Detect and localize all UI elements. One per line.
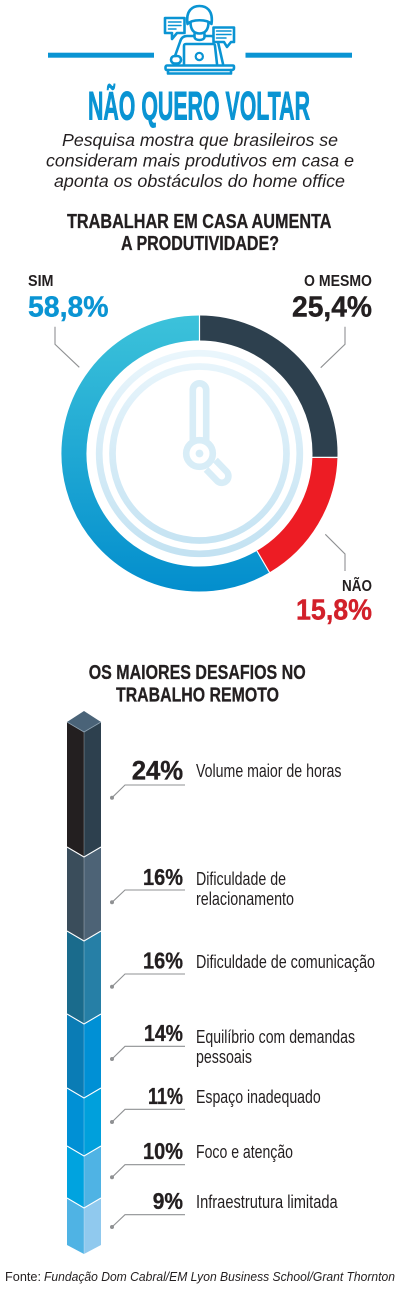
subtitle: Pesquisa mostra que brasileiros se — [62, 130, 338, 150]
subtitle — [46, 130, 354, 191]
heading: challenges: OS MAIORES DESAFIOS NO — [89, 662, 306, 684]
item: 11% espaco inadequado: 11% — [148, 1083, 183, 1109]
segment: sim 58,8% — [74, 328, 263, 579]
icon: person working at laptop with speech bubbles — [165, 6, 234, 74]
source note: Fonte: — [5, 1269, 41, 1284]
subtitle: aponta os obstáculos do home office — [54, 171, 345, 191]
segment 16% comunicacao — [67, 931, 101, 1024]
callout: sim: 58,8% — [28, 292, 108, 324]
segment 16% relacionamento — [67, 847, 101, 941]
segment: não 15,8% — [263, 458, 325, 562]
heading: productivity question — [67, 210, 332, 255]
item: 14% equilibrio com demandas pessoais: pessoais — [196, 1047, 252, 1067]
item: 16% dificuldade de relacionamento: Dificuldade de — [196, 869, 286, 889]
item: 14% equilibrio com demandas pessoais: Equilíbrio com demandas — [196, 1027, 355, 1047]
item: 24% volume maior de horas: Volume maior de horas — [196, 761, 342, 781]
callout: não: NÃO — [342, 577, 372, 595]
callout: não: 15,8% — [296, 594, 372, 626]
subtitle: consideram mais produtivos em casa e — [46, 150, 354, 170]
item: 9% infraestrutura limitada: 9% — [153, 1188, 183, 1214]
stacked 3D column — [67, 711, 101, 1254]
segment 11% — [67, 1088, 101, 1156]
callout: sim — [28, 273, 108, 367]
callout: sim: SIM — [28, 273, 54, 290]
segment 14% — [67, 1014, 101, 1098]
item: 10% foco e atencao — [110, 1138, 293, 1179]
callout: o mesmo: O MESMO — [304, 273, 372, 290]
header rule: right — [246, 53, 352, 58]
item: 16% dificuldade de relacionamento: relacionamento — [196, 889, 294, 909]
item: 10% foco e atencao: 10% — [143, 1138, 183, 1164]
callout: o mesmo — [292, 273, 372, 368]
segment: o mesmo 25,4% — [200, 328, 325, 458]
column cap — [67, 711, 101, 732]
item: 11% espaco inadequado — [110, 1083, 321, 1124]
item: 16% dificuldade de relacionamento: 16% — [143, 864, 183, 890]
item: 9% infraestrutura limitada — [110, 1188, 339, 1229]
item: 16% dificuldade de relacionamento — [110, 864, 294, 909]
heading: challenges: TRABALHO REMOTO — [116, 684, 279, 706]
item: 24% volume maior de horas: 24% — [132, 756, 183, 786]
segment 9% — [67, 1198, 101, 1254]
icon: clock hands — [186, 383, 228, 483]
callout: não — [296, 534, 372, 626]
heading: challenges — [89, 662, 306, 706]
item: 9% infraestrutura limitada: Infraestrutura limitada — [196, 1192, 339, 1212]
header rule: left — [48, 53, 154, 58]
item: 14% equilibrio com demandas pessoais — [110, 1020, 355, 1067]
heading: productivity question: A PRODUTIVIDADE? — [121, 232, 279, 255]
item: 16% dificuldade de comunicacao: 16% — [143, 948, 183, 974]
item: 14% equilibrio com demandas pessoais: 14% — [144, 1020, 183, 1046]
clock rings — [99, 353, 300, 554]
item: 10% foco e atencao: Foco e atenção — [196, 1142, 293, 1162]
donut chart: productivity answers — [74, 314, 339, 579]
segment 24% — [67, 722, 101, 857]
callout: o mesmo: 25,4% — [292, 292, 372, 324]
item: 24% volume maior de horas — [110, 756, 342, 800]
heading: productivity question: TRABALHAR EM CASA AUMENTA — [67, 210, 332, 233]
item: 11% espaco inadequado: Espaço inadequado — [196, 1087, 321, 1107]
segment 10% — [67, 1146, 101, 1208]
item: 16% dificuldade de comunicacao — [110, 948, 375, 989]
